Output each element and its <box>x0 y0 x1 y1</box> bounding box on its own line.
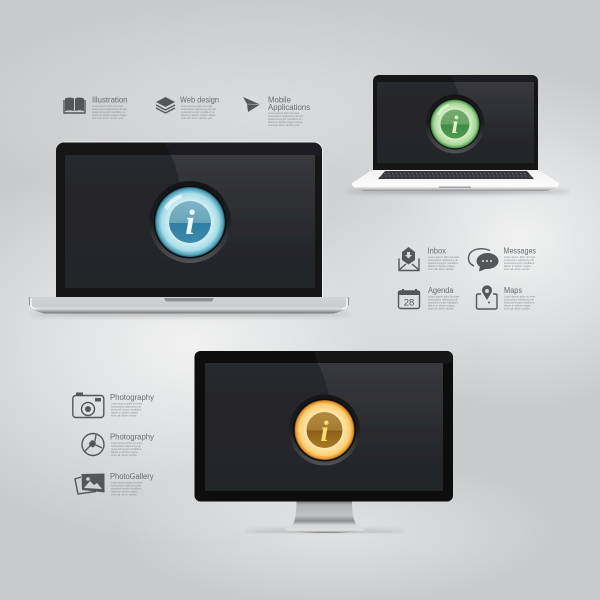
feature: Illustration: Illustration <box>92 96 128 104</box>
feature: Photography: labore et dolore magna <box>111 450 138 454</box>
feature: Web design: consectetur adipiscing elit sed <box>181 107 216 111</box>
feature: Agenda: enim ad minim veniam <box>428 306 454 310</box>
feature: PhotoGallery: Lorem ipsum dolor sit amet <box>111 480 143 484</box>
feature: Maps: eiusmod tempor incididunt <box>504 300 535 304</box>
feature: Web design: labore et dolore magna aliqua <box>181 113 216 117</box>
shadow <box>30 313 350 316</box>
feature: Photography: eiusmod tempor incididunt <box>111 408 142 412</box>
info button green <box>426 94 484 154</box>
top feature row <box>64 96 310 127</box>
feature: Inbox: eiusmod tempor incididunt <box>428 261 459 265</box>
feature: Mobile Applications: labore et dolore magna aliqua <box>268 120 303 124</box>
feature: Illustration: consectetur adipiscing elit sed <box>92 107 127 111</box>
laptop: large silver with blue info button <box>29 142 350 316</box>
feature: Maps: Maps <box>504 286 522 295</box>
bezel <box>194 351 453 502</box>
feature: Inbox <box>428 246 460 271</box>
monitor with orange info button <box>194 351 453 533</box>
feature: Illustration: Lorem ipsum dolor sit amet <box>92 104 124 108</box>
feature: Illustration: labore et dolore magna aliqua <box>92 113 127 117</box>
glare <box>318 363 443 491</box>
feature: Mobile Applications: Lorem ipsum dolor sit amet <box>268 111 300 115</box>
feature: Agenda: eiusmod tempor incididunt <box>428 300 459 304</box>
feature: Messages: Messages <box>504 246 536 256</box>
feature: Photography: Lorem ipsum dolor sit amet <box>111 441 143 445</box>
feature: Messages: enim ad minim veniam <box>504 267 530 271</box>
icon: map pin <box>476 285 497 309</box>
feature: Maps <box>504 286 536 310</box>
icon: stacked layers <box>156 97 175 113</box>
all artwork <box>29 75 570 533</box>
feature: Illustration <box>92 96 128 120</box>
shadow <box>346 190 570 194</box>
feature: Messages: eiusmod tempor incididunt <box>504 261 535 265</box>
base rounded corner highlights <box>31 298 347 309</box>
icon: messages <box>468 249 498 272</box>
icon: paper plane <box>243 97 260 112</box>
icon: camera <box>73 392 104 418</box>
info button green: i <box>452 112 459 139</box>
lid <box>373 75 538 170</box>
feature: Agenda: Agenda <box>428 286 454 295</box>
rim highlight <box>64 142 322 297</box>
feature: Inbox: Lorem ipsum dolor sit amet <box>428 255 460 259</box>
icon: photo gallery <box>75 474 104 494</box>
feature: PhotoGallery: eiusmod tempor incididunt <box>111 486 142 490</box>
feature: Photography: Lorem ipsum dolor sit amet <box>111 402 143 406</box>
base <box>352 170 559 191</box>
feature: Inbox: Inbox <box>428 246 446 256</box>
feature: Web design: Lorem ipsum dolor sit amet <box>181 104 213 108</box>
feature: Mobile Applications: enim ad minim veniam quis <box>268 123 300 127</box>
laptop: small white with green info button <box>346 75 570 194</box>
top bezel glare <box>314 352 452 363</box>
info button blue <box>149 181 231 263</box>
screen <box>205 363 443 491</box>
feature: PhotoGallery: consectetur adipiscing elit <box>111 484 141 488</box>
feature: Agenda: consectetur adipiscing elit <box>428 298 458 302</box>
feature: Inbox: consectetur adipiscing elit <box>428 258 458 262</box>
top bezel glare <box>451 76 537 82</box>
feature: Photography: Photography <box>110 432 154 442</box>
feature: Agenda <box>428 286 460 310</box>
icon: inbox <box>399 247 419 270</box>
feature: Photography: enim ad minim veniam <box>111 414 137 418</box>
feature: Photography: eiusmod tempor incididunt <box>111 447 142 451</box>
feature: Web design: Web design <box>180 96 219 104</box>
feature: Web design <box>180 96 219 120</box>
glare <box>171 155 315 288</box>
stand <box>285 501 365 533</box>
feature: Photography: labore et dolore magna <box>111 410 138 414</box>
screen <box>65 155 315 288</box>
top bezel glare <box>165 143 321 155</box>
feature: Messages: Lorem ipsum dolor sit amet <box>504 255 536 259</box>
info button blue: i <box>185 203 195 242</box>
glare <box>454 82 534 163</box>
feature: Agenda: labore et dolore magna <box>428 304 455 308</box>
feature: Mobile Applications: consectetur adipiscing elit sed <box>268 114 303 118</box>
feature: Illustration: enim ad minim veniam quis <box>92 116 124 120</box>
feature: Mobile Applications: Mobile <box>268 96 292 104</box>
feature: Photography <box>110 432 154 457</box>
icon: book <box>64 98 85 113</box>
feature: Maps: labore et dolore magna <box>504 304 531 308</box>
feature: Photography: Photography <box>110 393 154 402</box>
feature: Maps: consectetur adipiscing elit <box>504 298 534 302</box>
feature: Maps: enim ad minim veniam <box>504 306 530 310</box>
shadow <box>245 530 405 533</box>
feature: Inbox: enim ad minim veniam <box>428 267 454 271</box>
feature: Mobile Applications <box>268 96 310 127</box>
right feature grid <box>398 246 536 310</box>
feature: Photography: consectetur adipiscing elit <box>111 444 141 448</box>
feature: PhotoGallery: enim ad minim veniam <box>111 492 137 496</box>
icon: aperture <box>82 434 104 456</box>
feature: Photography <box>110 393 154 418</box>
keyboard <box>378 171 534 179</box>
feature: Messages <box>504 246 536 271</box>
feature: Web design: eiusmod tempor incididunt ut <box>181 110 214 114</box>
notch <box>164 298 214 302</box>
info button orange: i <box>320 415 329 448</box>
feature: PhotoGallery: PhotoGallery <box>110 472 154 481</box>
feature: Messages: consectetur adipiscing elit <box>504 258 534 262</box>
feature: Photography: consectetur adipiscing elit <box>111 404 141 408</box>
feature: Photography: enim ad minim veniam <box>111 453 137 457</box>
base end caps <box>30 297 348 305</box>
feature: PhotoGallery: labore et dolore magna <box>111 490 138 494</box>
feature: Inbox: labore et dolore magna <box>428 264 455 268</box>
feature: Web design: enim ad minim veniam quis <box>181 116 213 120</box>
left feature column <box>73 392 154 496</box>
lid <box>56 142 322 297</box>
notch <box>439 186 471 188</box>
feature: PhotoGallery <box>110 472 154 496</box>
screen <box>377 82 534 163</box>
feature: Mobile Applications: Applications <box>268 103 310 112</box>
feature: Agenda: Lorem ipsum dolor sit amet <box>428 294 460 298</box>
feature: Maps: Lorem ipsum dolor sit amet <box>504 294 536 298</box>
info button orange <box>289 394 360 466</box>
feature: Mobile Applications: eiusmod tempor incididunt ut <box>268 117 301 121</box>
base <box>29 297 349 314</box>
icon: calendar 28: 28 <box>404 298 414 308</box>
feature: Messages: labore et dolore magna <box>504 264 531 268</box>
feature: Illustration: eiusmod tempor incididunt ut <box>92 110 125 114</box>
